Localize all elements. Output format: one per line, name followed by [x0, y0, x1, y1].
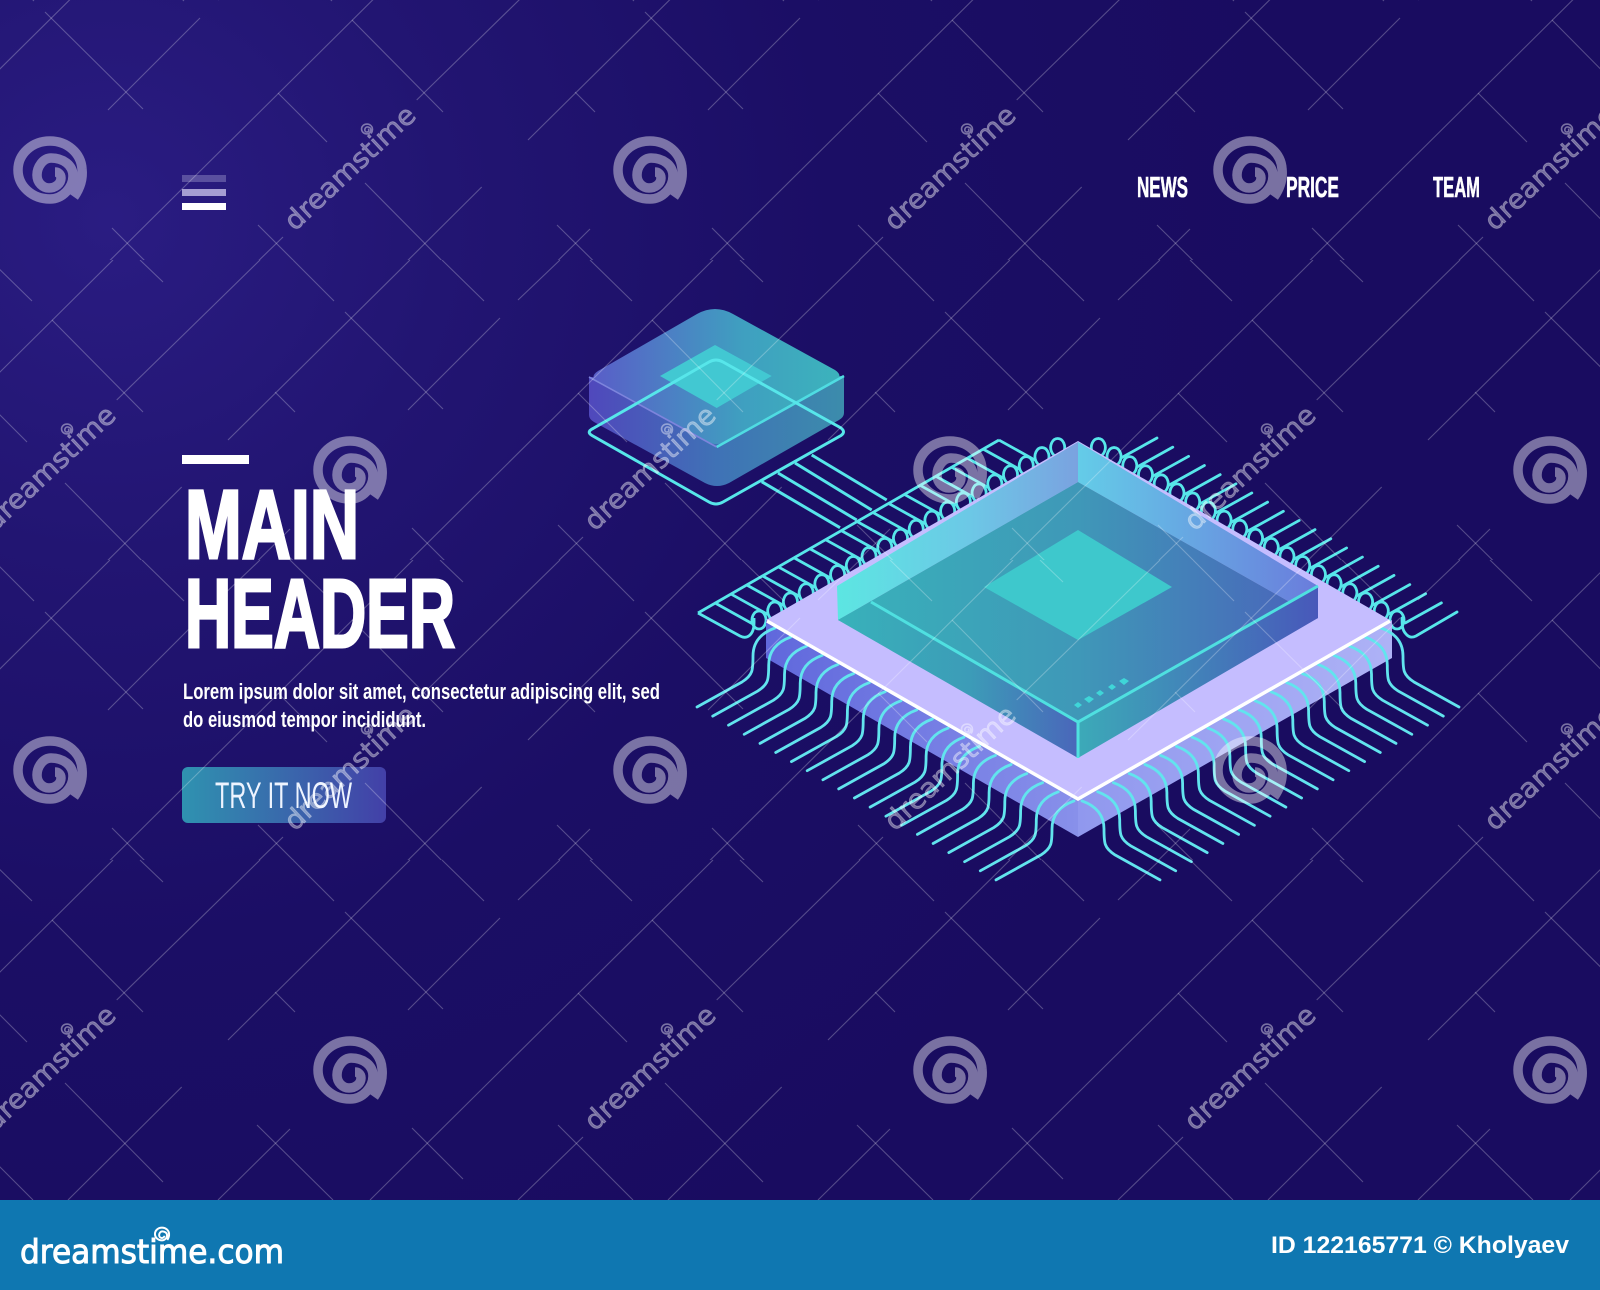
watermark text: dreamstime [578, 400, 722, 537]
die floor [838, 482, 1318, 722]
watermark text: dreamstime [1178, 1000, 1322, 1137]
call to action button [182, 767, 386, 823]
small chip outline base [589, 360, 844, 504]
die rim lines [871, 586, 1318, 758]
top navigation: NEWS [1137, 172, 1188, 204]
chip base left side [766, 620, 1078, 837]
main heading: MAIN [185, 470, 359, 579]
body text: do eiusmod tempor incididunt. [183, 707, 426, 732]
small chip [589, 309, 844, 504]
footer logo wordmark: dreamstime.com [20, 1232, 284, 1271]
front-right pins [1082, 628, 1459, 880]
watermark spirals [18, 141, 1582, 1099]
image id credit: ID 122165771 © Kholyaev [1271, 1232, 1570, 1259]
connector traces [762, 455, 887, 528]
base front white edge [767, 621, 1390, 799]
heading accent bar [182, 455, 249, 464]
die front-right face [1078, 586, 1318, 758]
top navigation [1137, 172, 1480, 204]
processor chip [697, 438, 1459, 880]
die status dots [1074, 678, 1129, 708]
die back-left wall [837, 442, 1078, 620]
main heading: HEADER [185, 559, 455, 668]
die inner square [984, 530, 1172, 640]
watermark text: dreamstime [578, 1000, 722, 1137]
top navigation: PRICE [1286, 172, 1339, 204]
main heading [185, 470, 455, 668]
front-left pins [697, 628, 1074, 880]
watermark text: dreamstime [278, 100, 422, 237]
watermark text: dreamstime [278, 700, 422, 837]
footer bar [0, 1200, 1600, 1290]
watermark text: dreamstime [878, 100, 1022, 237]
chip base right side [1078, 620, 1392, 837]
watermark text: dreamstime [878, 700, 1022, 837]
chip base top [766, 441, 1390, 798]
small chip side [589, 376, 844, 486]
small chip inner square [660, 345, 772, 408]
small chip top face [594, 309, 840, 444]
hamburger menu icon [182, 175, 226, 210]
body text [183, 679, 660, 732]
die back-right wall [1078, 442, 1318, 618]
die front-left face [838, 602, 1078, 758]
back-left comb pins [698, 438, 1065, 637]
small chip rim lines [589, 377, 717, 447]
footer logo spiral [155, 1228, 169, 1240]
top navigation: TEAM [1433, 172, 1480, 204]
back-right pins [1091, 438, 1457, 637]
watermark text: dreamstime [1178, 400, 1322, 537]
call to action button: TRY IT NOW [215, 775, 352, 816]
watermark small spiral marks [62, 124, 1572, 1034]
body text: Lorem ipsum dolor sit amet, consectetur adipiscing elit, sed [183, 679, 660, 704]
